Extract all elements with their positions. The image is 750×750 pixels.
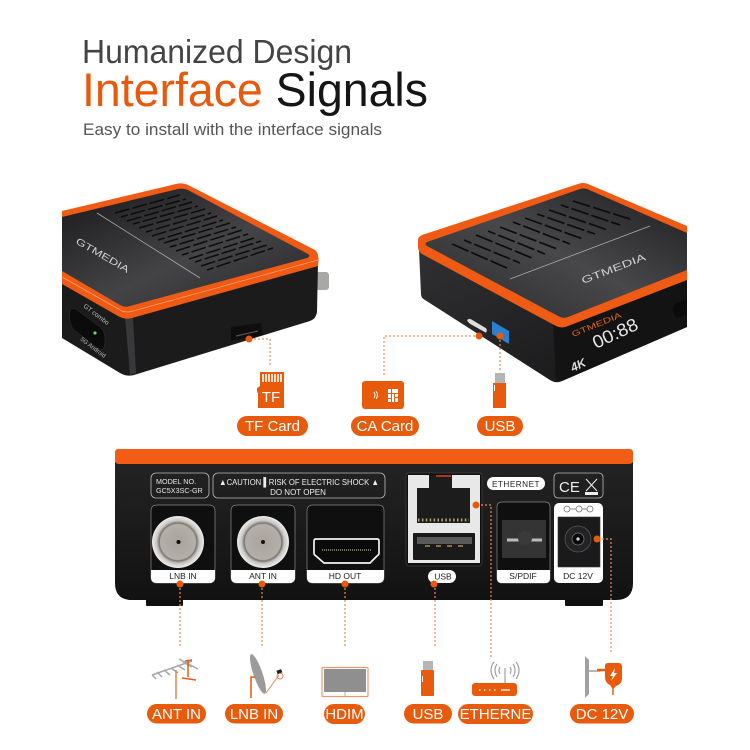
icon: TV xyxy=(322,668,368,696)
item: TV xyxy=(322,668,368,724)
device: back panel xyxy=(115,449,633,606)
body xyxy=(115,462,633,600)
callout: CA Card xyxy=(351,332,482,436)
item: satellite dish xyxy=(225,653,283,724)
title xyxy=(82,33,428,139)
GT combo label: GT combo xyxy=(82,303,110,327)
TF slot xyxy=(231,323,263,341)
port: Ethernet and USB xyxy=(406,473,482,566)
caution plate xyxy=(213,473,385,498)
model plate: GC5X3SC-GR xyxy=(156,486,203,495)
connector line xyxy=(384,336,479,376)
ventilation slots xyxy=(452,201,633,268)
port: S/PDIF xyxy=(497,502,550,583)
icon: TF card: TF xyxy=(262,389,280,406)
item: USB xyxy=(404,661,452,724)
top divider line xyxy=(97,213,200,278)
icon: adapter xyxy=(585,656,622,698)
port: LNB IN: LNB IN xyxy=(169,571,197,581)
label pill: USB xyxy=(413,706,443,723)
icon: router xyxy=(472,662,519,696)
connector: DC 12V xyxy=(594,536,611,653)
item: antenna xyxy=(147,659,206,724)
connector: LNB IN xyxy=(176,580,184,647)
device: left side view xyxy=(62,183,329,376)
label: USB xyxy=(428,570,456,583)
connector line xyxy=(499,336,501,370)
heading: Interface Signals: Interface Signals xyxy=(82,63,428,116)
port: ANT IN xyxy=(231,505,295,583)
brand GTMEDIA: GTMEDIA xyxy=(580,252,648,287)
port: HD OUT xyxy=(307,505,384,583)
CE and recycling marks xyxy=(554,473,603,498)
coax connector xyxy=(316,272,329,290)
clock display: 00:88 xyxy=(589,314,641,353)
green LED xyxy=(93,331,97,335)
port: ANT IN: ANT IN xyxy=(249,571,277,581)
top surface xyxy=(62,189,309,307)
front indicator panel xyxy=(70,308,105,350)
label pill: USB xyxy=(485,418,515,435)
item: power adapter xyxy=(570,656,634,724)
port: HD OUT: HD OUT xyxy=(329,571,361,581)
port: DC 12V xyxy=(554,503,603,583)
brand GTMEDIA: GTMEDIA xyxy=(74,236,132,276)
box body xyxy=(419,250,687,382)
callout: USB xyxy=(477,332,523,436)
4K mark: 4K xyxy=(567,355,589,375)
marker xyxy=(476,332,482,340)
top surface xyxy=(426,188,687,318)
caution plate: ▲CAUTION ▌RISK OF ELECTRIC SHOCK ▲ xyxy=(219,477,379,488)
device: right front view xyxy=(418,183,687,382)
icon: dish xyxy=(247,653,283,698)
marker xyxy=(496,332,504,340)
5G Android label: 5G Android xyxy=(79,337,106,360)
caution plate: DO NOT OPEN xyxy=(270,488,326,497)
icon: CA card xyxy=(362,381,404,409)
feet xyxy=(146,598,603,606)
orange band xyxy=(418,183,687,328)
label pill: LNB IN xyxy=(230,706,278,723)
blue USB port xyxy=(492,321,509,344)
subtitle: Easy to install with the interface signals xyxy=(83,120,382,139)
port: S/PDIF: S/PDIF xyxy=(509,571,537,581)
card slot xyxy=(467,319,487,333)
callout: TF Card xyxy=(237,336,308,436)
connector: ANT IN xyxy=(258,580,266,647)
item: router xyxy=(458,662,533,724)
model plate xyxy=(151,473,209,498)
orange band xyxy=(62,183,319,319)
CE and recycling marks: CE xyxy=(559,479,580,496)
connector line xyxy=(250,339,270,367)
label pill: ANT IN xyxy=(152,706,201,723)
orange top band xyxy=(115,449,633,464)
box body xyxy=(62,264,318,376)
label pill: TF Card xyxy=(245,418,300,435)
connector: HD OUT xyxy=(342,580,348,647)
marker xyxy=(246,336,252,342)
front indicator xyxy=(673,299,687,318)
connector: USB xyxy=(430,580,438,647)
heading: Humanized Design: Humanized Design xyxy=(82,33,352,70)
label: ETHERNET xyxy=(487,477,545,490)
icon: antenna xyxy=(152,659,198,699)
model plate: MODEL NO. xyxy=(156,477,196,486)
icon: USB stick xyxy=(493,373,506,408)
ventilation slots xyxy=(115,195,273,270)
label pill: CA Card xyxy=(357,418,413,435)
port: LNB IN xyxy=(151,505,215,583)
icon: USB stick xyxy=(421,661,434,696)
connector: Ethernet xyxy=(472,502,491,659)
label pill: HDIM xyxy=(325,706,364,723)
label pill: ETHERNE xyxy=(460,706,531,723)
top divider line xyxy=(510,226,650,279)
label: USB: USB xyxy=(434,572,452,582)
label: ETHERNET: ETHERNET xyxy=(492,480,540,489)
label pill: DC 12V xyxy=(576,706,628,723)
port: DC 12V: DC 12V xyxy=(563,571,593,581)
front brand: GTMEDIA xyxy=(570,310,624,339)
